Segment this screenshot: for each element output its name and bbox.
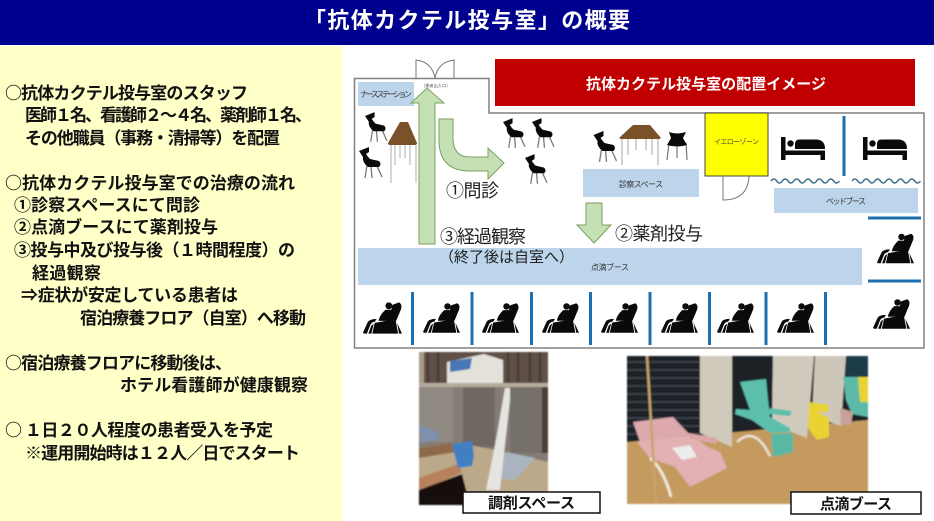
chair: front view (667, 132, 687, 160)
floor plan (354, 60, 924, 348)
nurse station (358, 82, 414, 106)
label: observation step: ③経過観察 (440, 227, 526, 247)
label: drip booth (791, 492, 921, 514)
label: observation step (439, 227, 574, 266)
text block: staff: 医師１名、看護師２～４名、薬剤師１名、 (25, 106, 312, 125)
yellow zone door (723, 176, 749, 200)
text block: staff: その他職員（事務・清掃等）を配置 (25, 128, 280, 148)
text block: patient numbers: ○ １日２０人程度の患者受入を予定 (5, 416, 273, 441)
text block: patient numbers (5, 416, 300, 463)
red banner (495, 59, 915, 106)
booth dividers (411, 216, 921, 345)
bed booth band: ベッドブース (826, 196, 866, 206)
entrance doors (416, 60, 454, 78)
entrance label: （患者出入口） (421, 82, 450, 89)
consultation space band (583, 169, 699, 197)
text block: patient numbers: ※運用開始時は１２人／日でスタート (25, 444, 300, 463)
text block: staff (5, 79, 312, 148)
beds (781, 137, 907, 160)
text block: hotel nurse: ○宿泊療養フロアに移動後は、 (5, 349, 232, 374)
photo: drip booth (627, 356, 868, 504)
title bar (0, 0, 934, 45)
chairs: nurse station (359, 112, 387, 178)
text block: treatment flow: 宿泊療養フロア（自室）へ移動 (80, 308, 306, 328)
text block: treatment flow: 経過観察 (32, 263, 101, 283)
text block: treatment flow: ③投与中及び投与後（１時間程度）の (14, 240, 295, 260)
arrow: observation up (411, 88, 444, 244)
recliner chairs (363, 234, 914, 334)
text block: treatment flow: ②点滴ブースにて薬剤投与 (14, 217, 218, 237)
text block: hotel nurse: ホテル看護師が健康観察 (120, 375, 308, 395)
yellow zone (705, 113, 768, 176)
room outline (354, 78, 924, 348)
label: dosing step: ②薬剤投与 (615, 224, 703, 244)
label: drip booth: 点滴ブース (820, 495, 892, 513)
text block: treatment flow: ⇒症状が安定している患者は (21, 281, 238, 306)
nurse station: ナースステーション (360, 90, 412, 99)
arrow: dosing down (577, 203, 611, 243)
text block: hotel nurse (5, 349, 308, 395)
photo: preparation space (419, 352, 548, 505)
bed booth band (774, 188, 918, 213)
drip booth band: 点滴ブース (591, 262, 629, 272)
panel: summary text (0, 46, 342, 521)
label: preparation space (463, 492, 600, 513)
arrow: consultation (439, 119, 504, 179)
label: consultation step: ①問診 (446, 181, 499, 201)
curtains (771, 179, 920, 183)
yellow zone: イエローゾーン (714, 138, 759, 146)
text block: treatment flow: ①診察スペースにて問診 (14, 196, 200, 215)
title: 「抗体カクテル投与室」の概要 (304, 8, 630, 33)
text block: staff: ○抗体カクテル投与室のスタッフ (5, 79, 248, 104)
bed divider (842, 116, 846, 176)
drip booth band (358, 248, 862, 285)
table: nurse station (388, 122, 417, 183)
chairs: consultation (503, 118, 616, 184)
text block: treatment flow: ○抗体カクテル投与室での治療の流れ (5, 169, 295, 194)
text block: treatment flow (5, 169, 306, 328)
table: consultation (619, 125, 661, 165)
red banner: 抗体カクテル投与室の配置イメージ (586, 75, 826, 93)
label: preparation space: 調剤スペース (488, 495, 575, 512)
label: observation step: （終了後は自室へ） (439, 249, 574, 266)
consultation space band: 診察スペース (619, 179, 663, 189)
